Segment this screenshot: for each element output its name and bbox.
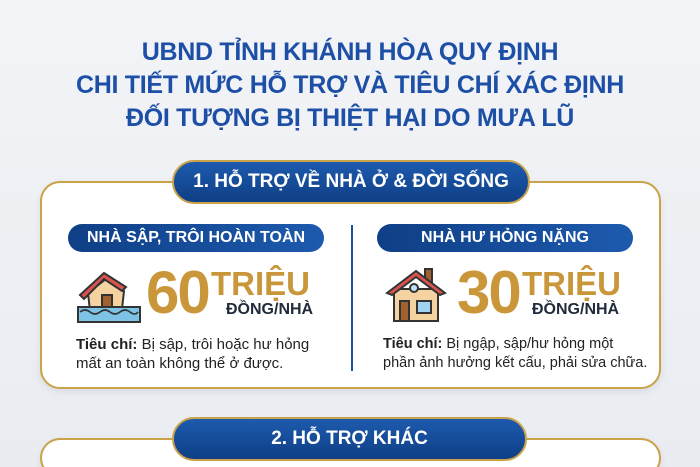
pill: heavily damaged house bbox=[377, 224, 633, 252]
amount: 30: 30 bbox=[457, 259, 520, 326]
pill: heavily damaged house: NHÀ HƯ HỎNG NẶNG bbox=[421, 229, 589, 246]
criteria left: mất an toàn không thể ở được. bbox=[76, 355, 283, 372]
title: UBND TỈNH KHÁNH HÒA QUY ĐỊNH bbox=[142, 38, 558, 66]
text: TRIỆU right: TRIỆU bbox=[522, 265, 621, 302]
tab: section 1 heading bbox=[172, 160, 530, 204]
title bbox=[76, 38, 624, 132]
divider bbox=[351, 225, 353, 371]
panel: housing support bbox=[40, 181, 661, 389]
tab: section 2 heading: 2. HỖ TRỢ KHÁC bbox=[271, 428, 428, 449]
criteria right: phần ảnh hưởng kết cấu, phải sửa chữa. bbox=[383, 355, 647, 371]
tab: section 2 heading bbox=[172, 417, 527, 461]
icon: damaged house bbox=[385, 268, 447, 322]
pill: collapsed house: NHÀ SẬP, TRÔI HOÀN TOÀN bbox=[87, 229, 305, 246]
criteria right bbox=[383, 336, 647, 371]
panel: other support bbox=[40, 438, 661, 467]
criteria right: Tiêu chí: Bị ngập, sập/hư hỏng một bbox=[383, 336, 613, 352]
icon: flooded house bbox=[77, 272, 141, 323]
criteria left: Tiêu chí: Bị sập, trôi hoặc hư hỏng bbox=[76, 336, 309, 353]
text: TRIỆU: TRIỆU bbox=[211, 265, 310, 302]
tab: section 1 heading: 1. HỖ TRỢ VỀ NHÀ Ở & ĐỜI SỐNG bbox=[193, 171, 509, 192]
amount: 60: 60 bbox=[146, 259, 209, 326]
title: CHI TIẾT MỨC HỖ TRỢ VÀ TIÊU CHÍ XÁC ĐỊNH bbox=[76, 71, 624, 99]
criteria left bbox=[76, 336, 309, 372]
pill: collapsed house bbox=[68, 224, 324, 252]
title: ĐỐI TƯỢNG BỊ THIỆT HẠI DO MƯA LŨ bbox=[126, 104, 574, 132]
text: unit: ĐỒNG/NHÀ bbox=[226, 301, 313, 318]
text: unit right: ĐỒNG/NHÀ bbox=[532, 301, 619, 318]
